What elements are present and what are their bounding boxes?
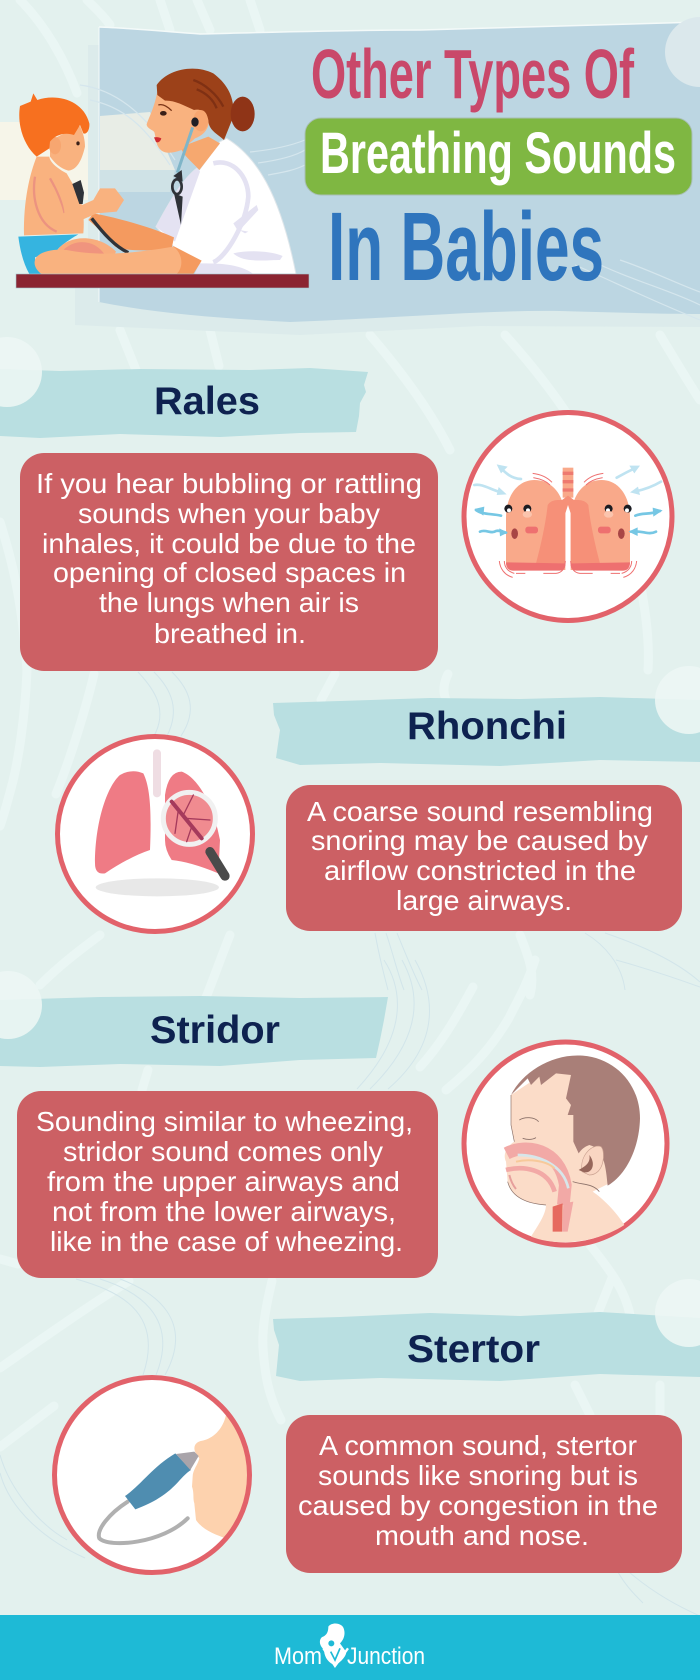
text box: mouth and nose.	[375, 1520, 589, 1551]
shelf	[16, 274, 309, 288]
logo: MomJunction: Mom	[274, 1643, 322, 1670]
baby leg	[35, 238, 202, 274]
text box: sounds when your baby	[78, 498, 380, 529]
text box: inhales, it could be due to the	[42, 528, 416, 559]
text box: the lungs when air is	[99, 587, 359, 618]
heading band	[0, 337, 368, 438]
heading band: Rales	[154, 380, 260, 423]
text box: opening of closed spaces in	[53, 557, 406, 588]
stethoscope tube	[72, 180, 128, 253]
text box: A common sound, stertor	[319, 1430, 637, 1461]
text box	[286, 785, 682, 931]
icon: lungs with magnifying glass	[58, 736, 252, 932]
text box: airflow constricted in the	[324, 855, 636, 886]
heading band	[0, 971, 388, 1067]
nurse head	[147, 69, 255, 170]
logo: MomJunction: Junction	[347, 1643, 425, 1670]
baby arm and hands	[53, 187, 124, 227]
text box: stridor sound comes only	[63, 1136, 383, 1167]
icon: nasal aspirator at baby's nose	[54, 1378, 259, 1572]
text box	[20, 453, 438, 671]
heading band	[273, 1279, 700, 1381]
text box: large airways.	[396, 885, 572, 916]
text box	[286, 1415, 682, 1573]
heading band: Stertor	[407, 1328, 540, 1371]
panel: Rales	[0, 337, 672, 671]
baby torso and head	[18, 93, 89, 274]
logo: MomJunction	[274, 1624, 425, 1670]
text box: caused by congestion in the	[298, 1490, 658, 1521]
icon: baby head airway cross-section	[464, 1042, 667, 1245]
heading band	[273, 666, 700, 766]
text box: sounds like snoring but is	[318, 1460, 638, 1491]
heading band: Rhonchi	[407, 705, 567, 748]
text box: breathed in.	[154, 618, 306, 649]
icon: cartoon lungs breathing	[464, 412, 672, 620]
text box: not from the lower airways,	[52, 1196, 396, 1227]
panel: Rhonchi	[58, 666, 700, 932]
text box: like in the case of wheezing.	[50, 1226, 403, 1257]
panel: header banner	[0, 17, 700, 335]
footer bar	[0, 1615, 700, 1680]
text box	[17, 1091, 438, 1278]
text box: Sounding similar to wheezing,	[36, 1106, 413, 1137]
text box: snoring may be caused by	[311, 825, 648, 856]
stethoscope	[172, 117, 199, 225]
panel: Stertor	[54, 1279, 700, 1573]
nurse coat	[156, 138, 296, 274]
heading band: Stridor	[150, 1009, 280, 1052]
text box: If you hear bubbling or rattling	[36, 468, 422, 499]
panel: Stridor	[0, 971, 667, 1278]
text box: A coarse sound resembling	[307, 796, 653, 827]
illustration: nurse examining baby	[18, 69, 296, 274]
nurse arm	[88, 213, 174, 250]
text box: from the upper airways and	[47, 1166, 400, 1197]
